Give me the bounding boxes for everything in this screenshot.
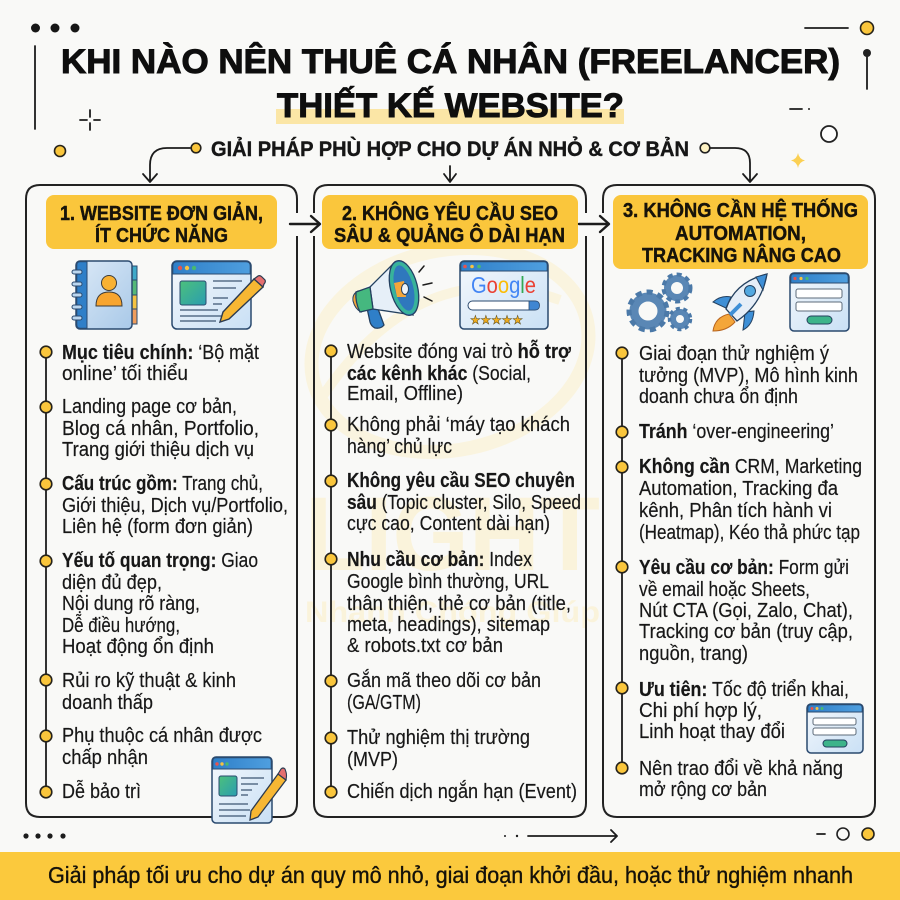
panel 1 text: chấp nhận (62, 747, 148, 769)
title: THIẾT KẾ WEBSITE? (277, 87, 624, 125)
panel 3 text: Không cần CRM, Marketing (639, 456, 862, 478)
panel 3 border (603, 185, 875, 817)
panel 1 text: Liên hệ (form đơn giản) (62, 516, 253, 538)
panel 1 text: Mục tiêu chính: ‘Bộ mặt (62, 342, 259, 364)
subtitle with arrows to panels: GIẢI PHÁP PHÙ HỢP CHO DỰ ÁN NHỎ & CƠ BẢN (211, 137, 689, 161)
panel 2 text: Website đóng vai trò hỗ trợ (347, 339, 572, 363)
panel 2 heading: SÂU & QUẢNG Ô DÀI HẠN (334, 223, 565, 247)
panel 2 text: hàng’ chủ lực (347, 436, 452, 458)
panel 1 text: online’ tối thiểu (62, 363, 188, 385)
panel 3 text: Automation, Tracking đa (639, 478, 839, 500)
panel 3 text: kênh, Phân tích hành vi (639, 500, 832, 522)
panel 2 border (314, 185, 586, 817)
panel: website don gian (26, 185, 297, 823)
panel 2 text: các kênh khác (Social, (347, 363, 531, 385)
icon: rocket (713, 274, 767, 331)
panel 2 text: (GA/GTM) (347, 692, 421, 714)
panel 1 text: Trang giới thiệu dịch vụ (62, 439, 254, 461)
panel 1 text (62, 342, 288, 803)
panel 1 text: Cấu trúc gồm: Trang chủ, (62, 473, 263, 495)
panel 3 heading (613, 195, 868, 269)
panel 1 text: Blog cá nhân, Portfolio, (62, 418, 259, 440)
decorative bottom marks (23, 828, 874, 842)
panel 2 text: thân thiện, thẻ cơ bản (title, (347, 593, 571, 615)
panel 3 text: về email hoặc Sheets, (639, 579, 810, 601)
panel 2 text: Thử nghiệm thị trường (347, 727, 530, 749)
icon: small web page with pencil (212, 757, 286, 823)
watermark logo: LIGHT (305, 476, 600, 593)
panel 2 text: meta, headings), sitemap (347, 614, 550, 636)
panel 2 heading (322, 195, 578, 249)
icon: google search window: Google (471, 272, 536, 298)
panel 2 text: Gắn mã theo dõi cơ bản (347, 669, 541, 692)
icon: google search window (460, 261, 548, 329)
panel 1 text: Phụ thuộc cá nhân được (62, 725, 262, 747)
panel 3 text: Tracking cơ bản (truy cập, (639, 621, 853, 643)
panel 1 heading (46, 195, 277, 249)
panel 3 text: doanh chưa ổn định (639, 386, 798, 408)
icon: megaphone (353, 258, 432, 328)
panel 2 text: Không yêu cầu SEO chuyên (347, 470, 575, 492)
panel 3 text: Giai đoạn thử nghiệm ý (639, 343, 829, 365)
panel 1 text: Landing page cơ bản, (62, 396, 237, 418)
panel 3 text: Tránh ‘over-engineering’ (639, 421, 834, 443)
panel 1 text: Yếu tố quan trọng: Giao (62, 550, 258, 572)
subtitle with arrows to panels (143, 137, 757, 182)
panel 3 text (639, 343, 862, 801)
panel 3 text: (Heatmap), Kéo thả phức tạp (639, 522, 860, 544)
panel 2 text: Email, Offline) (347, 383, 463, 405)
watermark logo (292, 223, 608, 629)
panel 3 text: nguồn, trang) (639, 643, 748, 665)
icon: gears (629, 274, 690, 330)
panel 3 text: Nên trao đổi về khả năng (639, 758, 843, 780)
panel 3 text: tưởng (MVP), Mô hình kinh (639, 365, 858, 387)
panel 1 text: Giới thiệu, Dịch vụ/Portfolio, (62, 495, 288, 517)
arrow: panel 2 to panel 3 (579, 216, 609, 232)
panel 3 text: Ưu tiên: Tốc độ triển khai, (639, 679, 849, 701)
panel: khong can he thong automation (603, 185, 875, 817)
watermark logo: Nhanh Chóng Giúp (305, 596, 600, 629)
arrow: panel 1 to panel 2 (290, 216, 320, 232)
panel 2 text: Không phải ‘máy tạo khách (347, 414, 570, 436)
panel 2 text: cực cao, Content dài hạn) (347, 513, 550, 535)
panel 3 text: Yêu cầu cơ bản: Form gửi (639, 557, 849, 579)
panel 2 text: Google bình thường, URL (347, 571, 549, 593)
panel 1 heading: 1. WEBSITE ĐƠN GIẢN, (60, 202, 263, 225)
title: KHI NÀO NÊN THUÊ CÁ NHÂN (FREELANCER) (61, 43, 840, 81)
panel 2 text: Chiến dịch ngắn hạn (Event) (347, 780, 577, 803)
panel 1 timeline (40, 346, 52, 798)
panel 2 timeline (325, 345, 337, 798)
panel 2 text: & robots.txt cơ bản (347, 635, 503, 657)
panel 2 text (347, 339, 581, 803)
decorative top marks (31, 22, 874, 168)
icon: form window (790, 273, 849, 331)
icon: google search window: ★★★★★ (470, 313, 523, 327)
panel 1 text: diện đủ đẹp, (62, 572, 162, 594)
footer banner (0, 852, 900, 900)
panel 2 text: Nhu cầu cơ bản: Index (347, 549, 532, 571)
panel 3 text: Chi phí hợp lý, (639, 700, 762, 722)
panel 2 heading: 2. KHÔNG YÊU CẦU SEO (342, 201, 558, 225)
panel 1 text: Rủi ro kỹ thuật & kinh (62, 670, 236, 692)
panel 3 heading: TRACKING NÂNG CAO (642, 243, 841, 267)
panel 1 heading: ÍT CHỨC NĂNG (95, 223, 228, 247)
footer banner: Giải pháp tối ưu cho dự án quy mô nhỏ, giai đoạn khởi đầu, hoặc thử nghiệm nhanh (48, 862, 853, 888)
panel 1 text: Hoạt động ổn định (62, 636, 214, 658)
panel 3 timeline (616, 347, 628, 774)
panel 3 text: mở rộng cơ bản (639, 779, 767, 801)
icon: small form window (807, 704, 863, 753)
panel 1 border (26, 185, 297, 817)
panel 1 text: Dễ bảo trì (62, 780, 141, 803)
panel 2 text: sâu (Topic cluster, Silo, Speed (347, 492, 581, 514)
panel 1 text: Dễ điều hướng, (62, 614, 180, 637)
panel: khong yeu cau seo (314, 185, 586, 817)
panel 3 heading: 3. KHÔNG CẦN HỆ THỐNG (623, 198, 858, 222)
panel 3 heading: AUTOMATION, (675, 222, 806, 245)
panel 1 text: Nội dung rõ ràng, (62, 593, 200, 615)
panel 3 text: Nút CTA (Gọi, Zalo, Chat), (639, 600, 853, 622)
panel 1 text: doanh thấp (62, 692, 153, 714)
icon: web page with pencil (172, 261, 265, 329)
icon: address book (72, 261, 137, 329)
panel 2 text: (MVP) (347, 749, 398, 771)
panel 3 text: Linh hoạt thay đổi (639, 721, 785, 743)
title (61, 43, 840, 125)
